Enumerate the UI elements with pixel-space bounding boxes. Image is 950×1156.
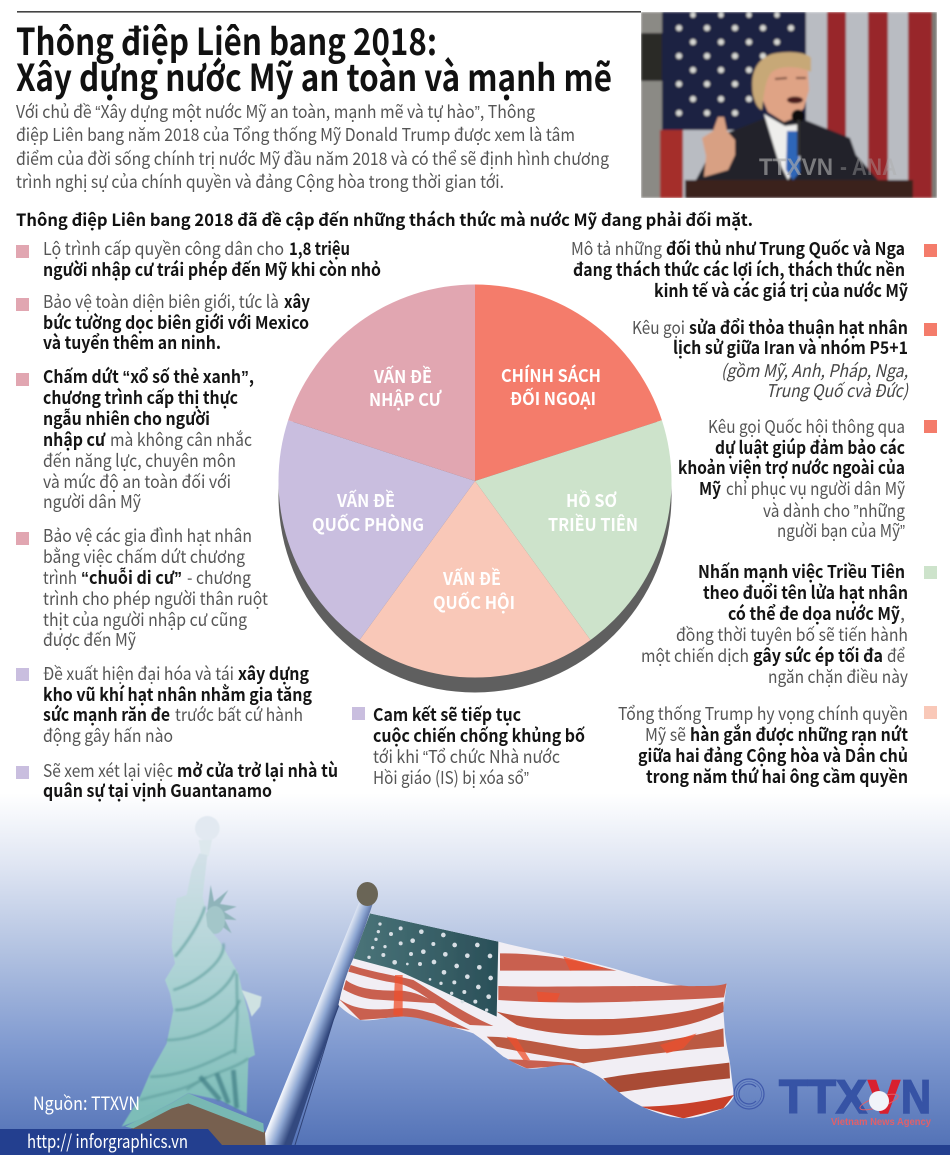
intro paragraph: Với chủ đề “Xây dựng một nước Mỹ an toàn, mạnh mẽ và tự hào”, Thông <box>16 99 535 124</box>
item: North Korea: đồng thời tuyên bố sẽ tiến hành <box>676 622 908 647</box>
right column: foreign policy, North Korea and congress items <box>571 236 937 789</box>
item: nuclear arsenal: trước bất cứ hành <box>175 702 303 727</box>
item: path to citizenship: người nhập cư trái phép đến Mỹ khi còn nhỏ <box>43 257 381 282</box>
label: immigration: VẤN ĐỀ <box>373 364 432 389</box>
footer url: http:// inforgraphics.vn <box>27 1128 188 1154</box>
item: bipartisan unity: Tổng thống Trump hy vọng chính quyền <box>618 701 908 726</box>
torch <box>195 816 220 857</box>
intro paragraph: điểm của đời sống chính trị nước Mỹ đầu năm 2018 và có thể sẽ định hình chương <box>16 146 609 171</box>
item: green card lottery: chương trình cấp thị thực <box>43 385 238 410</box>
item: foreign aid: và dành cho ”những <box>763 498 905 523</box>
item: North Korea: một chiến dịch <box>641 643 749 668</box>
tablet <box>242 990 262 1017</box>
item: nuclear arsenal: xây dựng <box>238 661 309 686</box>
centre item: counter-terrorism: cuộc chiến chống khủng bố <box>373 723 585 748</box>
face <box>760 64 809 122</box>
label: foreign policy: CHÍNH SÁCH <box>501 363 601 388</box>
item: chain migration: - chương <box>187 565 251 590</box>
label: foreign policy <box>501 363 601 411</box>
bottom sky background <box>0 793 950 1145</box>
photo: Donald Trump at podium: TTXVN <box>759 154 833 181</box>
item: North Korea: theo đuổi tên lửa hạt nhân <box>703 580 908 605</box>
logo: TTXVN Vietnam News Agency: V <box>868 1070 901 1123</box>
item: rivals: Mô tả những <box>571 236 662 261</box>
label: foreign policy: ĐỐI NGOẠI <box>510 386 596 411</box>
item: foreign aid: chỉ phục vụ người dân Mỹ <box>726 476 905 501</box>
label: North Korea <box>548 488 638 537</box>
item: nuclear arsenal: kho vũ khí hạt nhân nhằm gia tăng <box>43 682 312 707</box>
item: green card lottery: nhập cư <box>43 427 106 452</box>
item: green card lottery: ngẫu nhiên cho người <box>43 406 210 431</box>
item: path to citizenship: 1,8 triệu <box>289 236 350 261</box>
item: bipartisan unity <box>618 701 937 789</box>
item: rivals: kinh tế và các giá trị của nước Mỹ <box>654 278 908 303</box>
illustration: American flag <box>338 914 734 1118</box>
item: chain migration: trình cho phép người thân ruột <box>43 586 268 611</box>
item: foreign aid: khoản viện trợ nước ngoài của <box>678 455 905 480</box>
pedestal stone <box>130 1103 267 1145</box>
logo: TTXVN Vietnam News Agency <box>779 1070 931 1128</box>
item: Guantanamo: quân sự tại vịnh Guantanamo <box>43 778 272 803</box>
centre item: counter-terrorism: Hồi giáo (IS) bị xóa sổ” <box>373 765 529 790</box>
item: rivals: đối thủ như Trung Quốc và Nga <box>666 236 905 261</box>
item: North Korea: có thể đe dọa nước Mỹ <box>728 601 900 626</box>
item: Iran deal: sửa đổi thỏa thuận hạt nhân <box>689 315 908 340</box>
canton <box>353 913 498 1017</box>
item: chain migration: trình <box>43 565 77 590</box>
label: immigration <box>369 364 442 412</box>
podium <box>685 180 913 198</box>
item: bipartisan unity: trong năm thứ hai ông cầm quyền <box>646 764 908 789</box>
item: bipartisan unity: giữa hai đảng Cộng hòa và Dân chủ <box>638 743 908 768</box>
head <box>205 906 225 934</box>
label: North Korea: TRIỀU TIÊN <box>548 512 638 537</box>
item: border wall: bức tường dọc biên giới với Mexico <box>43 310 309 335</box>
item: chain migration: được đến Mỹ <box>43 627 136 652</box>
item: North Korea: để <box>887 643 905 668</box>
label: defence: QUỐC PHÒNG <box>312 512 424 537</box>
illustration: flagpole <box>265 882 378 1145</box>
item: path to citizenship: Lộ trình cấp quyền công dân cho <box>43 236 284 261</box>
label: North Korea: HỒ SƠ <box>566 488 617 513</box>
item: rivals <box>571 236 937 303</box>
item: border wall: xây <box>284 289 310 314</box>
item: North Korea: Nhấn mạnh việc Triều Tiên <box>698 559 905 584</box>
label: congress <box>433 566 515 615</box>
logo: TTXVN Vietnam News Agency: N <box>901 1070 931 1123</box>
item: chain migration: Bảo vệ các gia đình hạt nhân <box>43 523 252 548</box>
item: chain migration <box>16 523 268 652</box>
centre item: counter-terrorism: Cam kết sẽ tiếp tục <box>373 702 521 727</box>
logo: TTXVN Vietnam News Agency: TTX <box>779 1070 867 1123</box>
item: Iran deal: (gồm Mỹ, Anh, Pháp, Nga, <box>721 358 908 383</box>
left column: immigration and defence items <box>16 236 381 803</box>
sunlight highlights <box>393 957 697 1060</box>
item: Iran deal: lịch sử giữa Iran và nhóm P5+1 <box>673 335 908 360</box>
item: Guantanamo <box>16 758 338 803</box>
item: border wall <box>16 289 310 355</box>
hair <box>752 52 811 110</box>
label: congress: QUỐC HỘI <box>433 590 515 615</box>
pie chart <box>278 284 672 692</box>
item: foreign aid <box>678 414 937 543</box>
robe <box>122 853 255 1127</box>
item: green card lottery: mà không cân nhắc <box>110 427 252 452</box>
logo: TTXVN Vietnam News Agency: Vietnam News Agency <box>831 1116 931 1128</box>
copyright symbol <box>734 1079 764 1109</box>
item: Guantanamo: mở cửa trở lại nhà tù <box>177 758 338 783</box>
item: green card lottery: Chấm dứt “xổ số thẻ xanh”, <box>43 364 254 389</box>
centre item: counter-terrorism: tới khi “Tổ chức Nhà nước <box>373 744 560 769</box>
item: Iran deal: Kêu gọi <box>632 315 685 340</box>
flag cloth <box>338 914 734 1118</box>
suit <box>695 118 878 182</box>
item: nuclear arsenal: sức mạnh răn đe <box>43 702 170 727</box>
item: green card lottery: đến năng lực, chuyên môn <box>43 448 236 473</box>
item: nuclear arsenal: động gây hấn nào <box>43 723 173 748</box>
stars <box>367 922 493 1012</box>
title: Thông điệp Liên bang 2018: <box>16 12 437 66</box>
pedestal top slab <box>125 1093 264 1133</box>
item: foreign aid: người bạn của Mỹ” <box>777 518 905 543</box>
photo: Donald Trump at podium <box>641 12 937 198</box>
item: North Korea: ngăn chặn điều này <box>768 664 908 689</box>
item: border wall: Bảo vệ toàn diện biên giới, tức là <box>43 289 279 314</box>
item: foreign aid: Kêu gọi Quốc hội thông qua <box>708 414 905 439</box>
item: chain migration: “chuỗi di cư” <box>81 565 182 590</box>
item: bipartisan unity: hàn gắn được những rạn nứt <box>690 722 909 747</box>
microphone <box>792 110 804 122</box>
label: defence: VẤN ĐỀ <box>336 488 395 513</box>
item: nuclear arsenal: Đề xuất hiện đại hóa và tái <box>43 661 234 686</box>
subheading: Thông điệp Liên bang 2018 đã đề cập đến những thách thức mà nước Mỹ đang phải đối mặt. <box>16 206 753 231</box>
item: foreign aid: dự luật giúp đảm bảo các <box>715 435 905 460</box>
title: Xây dựng nước Mỹ an toàn và mạnh mẽ <box>16 48 612 102</box>
robe shading <box>140 907 248 1108</box>
shirt and tie <box>764 114 800 180</box>
intro paragraph <box>16 99 609 194</box>
centre item: counter-terrorism <box>352 702 585 790</box>
red stripes <box>338 953 734 1118</box>
facial features <box>775 78 806 79</box>
photo: Donald Trump at podium: - ANA <box>840 154 897 181</box>
item: Iran deal <box>632 315 937 403</box>
item: bipartisan unity: Mỹ sẽ <box>645 722 686 747</box>
item: chain migration: bằng việc chấm dứt chương <box>43 544 245 569</box>
item: border wall: và tuyển thêm an ninh. <box>43 330 221 355</box>
item: green card lottery: và mức độ an toàn đối với <box>43 469 231 494</box>
item: North Korea: gây sức ép tối đa <box>753 643 883 668</box>
top rule <box>17 11 641 13</box>
intro paragraph: trình nghị sự của chính quyền và đảng Cộng hòa trong thời gian tới. <box>16 169 504 194</box>
item: North Korea: , <box>900 601 905 626</box>
label: defence <box>312 488 424 537</box>
label: immigration: NHẬP CƯ <box>369 387 442 412</box>
source line: Nguồn: TTXVN <box>33 1090 140 1116</box>
item: green card lottery <box>16 364 254 514</box>
item: Iran deal: Trung Quố cvà Đức) <box>766 378 909 403</box>
item: path to citizenship <box>16 236 381 282</box>
illustration: Statue of Liberty <box>122 816 267 1145</box>
crown spikes <box>207 885 237 933</box>
footer bar <box>0 1129 950 1155</box>
item: chain migration: thịt của người nhập cư cũng <box>43 607 247 632</box>
label: congress: VẤN ĐỀ <box>442 566 501 591</box>
intro paragraph: điệp Liên bang năm 2018 của Tổng thống Mỹ Donald Trump được xem là tâm <box>16 122 575 147</box>
item: foreign aid: Mỹ <box>699 476 721 501</box>
item: Guantanamo: Sẽ xem xét lại việc <box>43 758 173 783</box>
hand <box>702 117 735 177</box>
item: nuclear arsenal <box>16 661 312 748</box>
item: North Korea <box>641 559 937 689</box>
title <box>16 12 612 102</box>
item: rivals: đang thách thức các lợi ích, thách thức nền <box>573 257 905 282</box>
item: green card lottery: người dân Mỹ <box>43 489 141 514</box>
